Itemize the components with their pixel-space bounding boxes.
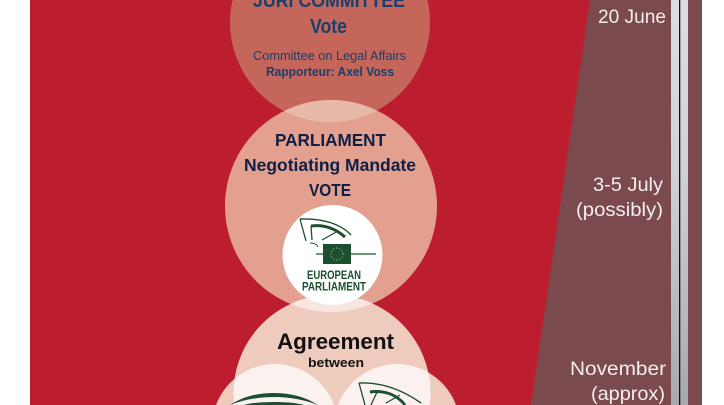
text: parliament mandate — [244, 130, 416, 200]
circle: JURI committee vote — [230, 0, 430, 122]
timeline bar — [671, 0, 688, 405]
timeline wedge — [531, 0, 702, 405]
logo: European Parliament partial — [359, 383, 421, 405]
text: agreement heading — [277, 329, 395, 370]
timeline date labels: (possibly) — [576, 199, 663, 221]
text: parliament mandate: PARLIAMENT — [275, 130, 386, 150]
overlap: parliament party and agreement circles — [338, 364, 430, 405]
overlap: JURI and parliament circles — [284, 100, 377, 122]
timeline date labels — [570, 6, 667, 405]
circle: council party — [216, 364, 334, 405]
timeline date labels: (approx) — [591, 383, 665, 405]
circle: parliament negotiating mandate — [225, 100, 437, 312]
logo: European Parliament: EUROPEAN — [307, 268, 361, 282]
text: parliament mandate: VOTE — [309, 180, 351, 200]
text: JURI committee: Vote — [310, 16, 347, 38]
circle: agreement — [233, 295, 430, 405]
logo: European Parliament: PARLIAMENT — [302, 280, 367, 294]
timeline date labels: 20 June — [598, 6, 666, 28]
logo: Council — [230, 393, 318, 405]
circle: parliament party — [338, 364, 456, 405]
logo: European Parliament — [300, 219, 376, 294]
overlap: parliament and agreement circles — [290, 298, 372, 312]
text: JURI committee: Rapporteur: Axel Voss — [266, 65, 394, 79]
text: JURI committee — [253, 0, 406, 79]
timeline date labels: November — [570, 358, 667, 380]
text: agreement heading: Agreement — [277, 329, 395, 354]
text: JURI committee: Committee on Legal Affairs — [253, 48, 406, 63]
text: agreement heading: between — [308, 356, 364, 370]
logo disc: European Parliament — [282, 205, 382, 305]
overlap: council and agreement circles — [234, 364, 334, 405]
timeline date labels: 3-5 July — [593, 174, 663, 196]
text: parliament mandate: Negotiating Mandate — [244, 155, 416, 175]
